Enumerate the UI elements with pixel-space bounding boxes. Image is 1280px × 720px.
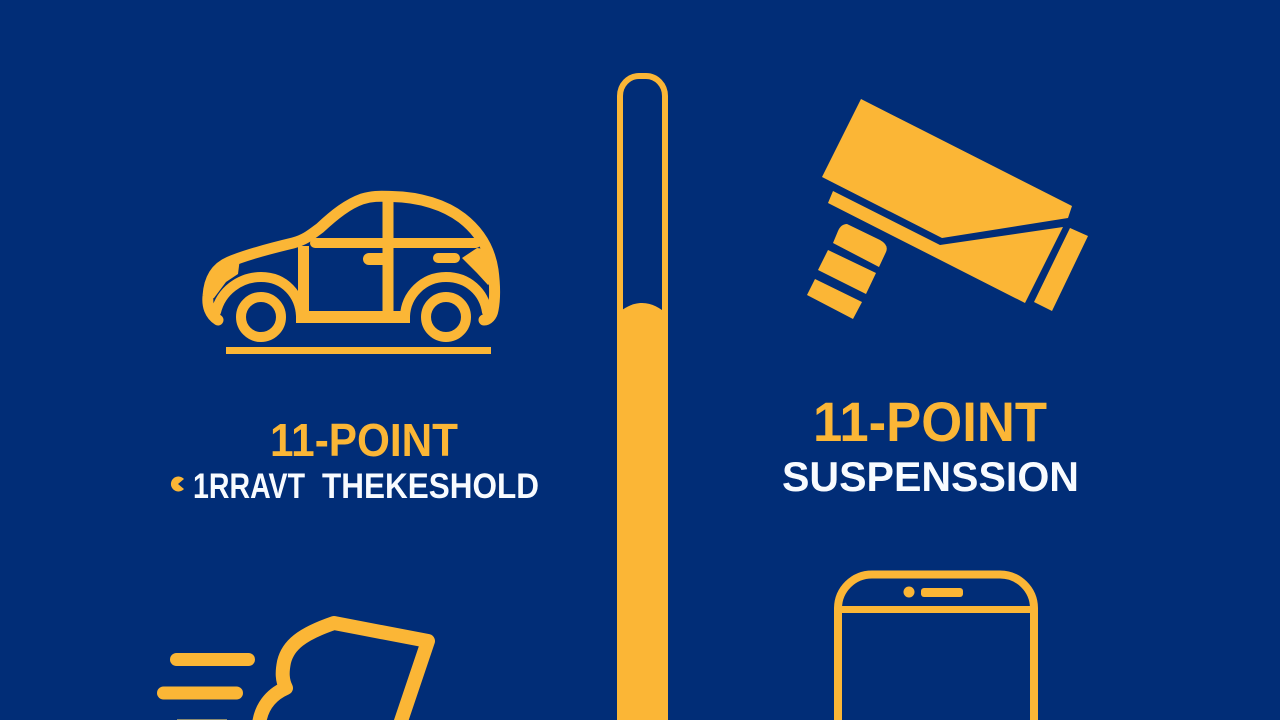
centre pillar [382,197,394,316]
phone speaker [921,588,963,597]
phone top divider [838,606,1034,613]
car body outline [208,196,495,320]
first word: 1RRAVT [193,467,305,506]
mount segment 1 [833,224,887,267]
phone frame [838,574,1034,720]
camera lens strip [1034,228,1088,311]
text: car heading: 11-POINT [270,414,458,466]
ground line [226,347,491,354]
tail light [462,248,497,285]
front pillar [298,246,309,316]
sill line [296,311,410,323]
central progress bar [617,76,667,720]
camera housing bottom [828,191,1063,303]
speed line 3 [177,719,227,720]
icon: car [204,196,497,350]
shape outline [259,623,428,720]
front wheel [241,297,281,337]
bar fill [617,303,667,720]
bar outline [620,76,665,720]
camera housing top [822,99,1072,238]
second word: THEKESHOLD [322,467,539,506]
text: camera subheading: SUSPENSSION [782,453,1079,500]
rear wheel [426,297,466,337]
rear door handle [433,253,460,263]
text: car subheading [193,467,539,506]
mount segment 3 [807,279,862,319]
door handle [363,253,383,265]
rear wheel arch [405,277,487,316]
icon: smartphone [838,574,1034,720]
front wheel arch [216,277,301,316]
icon: speeding shape [164,623,428,720]
icon: security camera [807,99,1088,319]
glyph: small yellow mark [171,477,184,492]
headlight blob [204,258,240,298]
mount segment 2 [818,250,876,294]
belt line [315,238,476,248]
text: camera heading: 11-POINT [813,390,1047,453]
speed line 2 [164,686,236,700]
speed line 1 [176,653,248,666]
phone camera dot [904,586,914,598]
